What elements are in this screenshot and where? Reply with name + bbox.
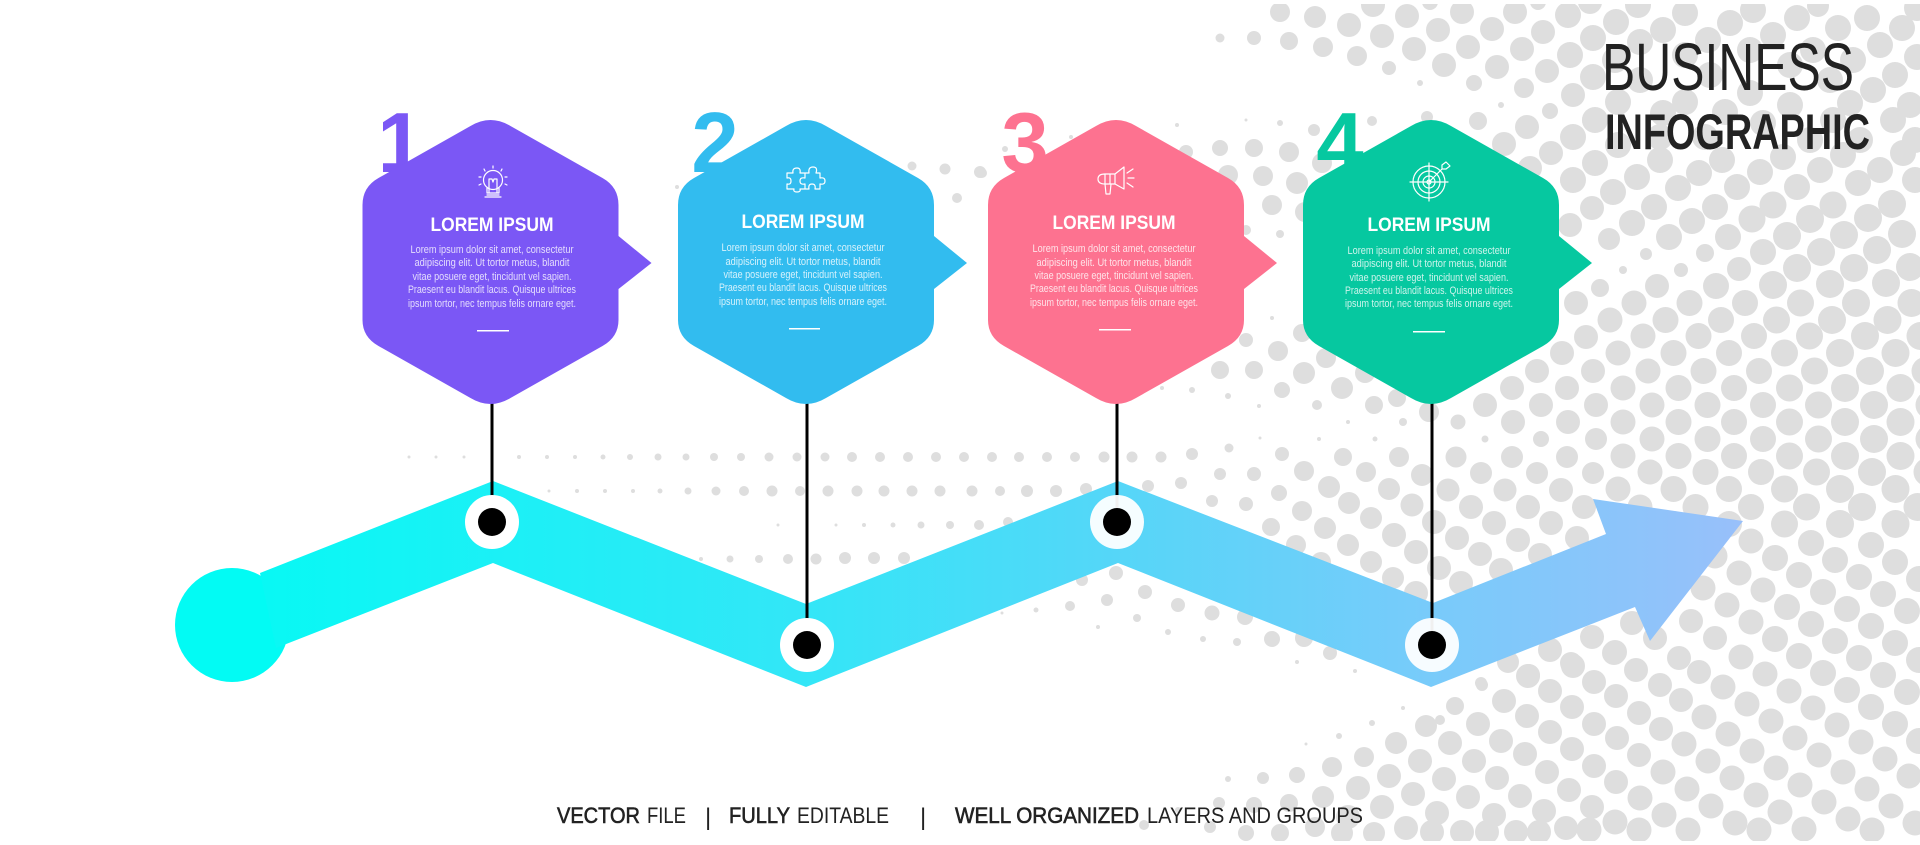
- panel: step 2: [678, 96, 967, 404]
- number 2: 2: [691, 96, 739, 191]
- dots around the arrow band: [1000, 428, 1644, 725]
- body text: adipiscing elit. Ut tortor metus, blandit: [726, 256, 880, 268]
- hexagon 2: [678, 120, 967, 404]
- hexagon 4: [1303, 120, 1592, 404]
- footer caption: |: [705, 804, 711, 831]
- hexagon 3: [988, 120, 1277, 404]
- node 2 marker: [780, 618, 834, 672]
- footer caption: WELL ORGANIZED: [955, 803, 1139, 828]
- top band of dots: [1216, 0, 1920, 205]
- heading: LOREM IPSUM: [430, 215, 554, 236]
- body text: adipiscing elit. Ut tortor metus, blandit: [1352, 258, 1506, 270]
- footer caption: VECTOR: [557, 803, 640, 828]
- footer caption: FULLY: [729, 803, 790, 828]
- body text: ipsum tortor, nec tempus felis ornare eget.: [719, 296, 887, 308]
- body text: ipsum tortor, nec tempus felis ornare eget.: [408, 298, 576, 310]
- arrow start circle: [175, 568, 289, 682]
- node 1 marker: [465, 495, 519, 549]
- heading: LOREM IPSUM: [742, 212, 864, 233]
- footer caption: |: [920, 804, 926, 831]
- body text: Lorem ipsum dolor sit amet, consectetur: [410, 244, 574, 256]
- number 1: 1: [376, 96, 424, 191]
- heading: LOREM IPSUM: [1368, 215, 1490, 236]
- number 3: 3: [1001, 96, 1049, 191]
- horizontal rows of small dots: [408, 444, 1234, 564]
- body text: vitae posuere eget, tincidunt vel sapien.: [724, 269, 882, 281]
- number 4: 4: [1316, 96, 1364, 191]
- body text: adipiscing elit. Ut tortor metus, blandit: [1036, 257, 1192, 269]
- hexagon 1: [362, 120, 652, 404]
- icon: light bulb: [479, 166, 507, 197]
- body text: Praesent eu blandit lacus. Quisque ultrices: [719, 282, 887, 294]
- body text: [719, 242, 887, 308]
- footer caption: FILE: [647, 803, 686, 828]
- arrow body and head: [260, 481, 1743, 687]
- body text: Lorem ipsum dolor sit amet, consectetur: [1032, 243, 1196, 255]
- footer caption: EDITABLE: [797, 803, 889, 828]
- body text: Lorem ipsum dolor sit amet, consectetur: [722, 242, 885, 254]
- panel: step 1: [362, 96, 652, 404]
- icon: megaphone: [1098, 167, 1134, 194]
- connector lines: [492, 400, 1432, 645]
- dots between and behind the hexagons: [675, 111, 1608, 434]
- icon: target: [1410, 162, 1450, 201]
- body text: [1345, 245, 1513, 310]
- regular lattice rows on the right: [1598, 289, 1920, 538]
- body text: ipsum tortor, nec tempus felis ornare eget.: [1345, 298, 1513, 310]
- heading: LOREM IPSUM: [1052, 213, 1176, 234]
- footer caption: [557, 803, 1363, 831]
- body text: [1030, 243, 1198, 309]
- zigzag arrow band: [175, 481, 1743, 687]
- body text: Praesent eu blandit lacus. Quisque ultrices: [408, 284, 576, 296]
- node 3 marker: [1090, 495, 1144, 549]
- node 4 marker: [1405, 618, 1459, 672]
- body text: [408, 244, 576, 310]
- panel: step 3: [988, 96, 1277, 404]
- body text: vitae posuere eget, tincidunt vel sapien.: [412, 271, 572, 283]
- body text: vitae posuere eget, tincidunt vel sapien.: [1350, 272, 1508, 284]
- lower right diagonal dots: [1139, 528, 1920, 844]
- right band dots above the regular lattice: [1591, 190, 1920, 299]
- icon: puzzle: [787, 167, 825, 192]
- body text: Praesent eu blandit lacus. Quisque ultrices: [1345, 285, 1513, 297]
- body text: Lorem ipsum dolor sit amet, consectetur: [1348, 245, 1511, 257]
- panel: step 4: [1303, 96, 1592, 404]
- footer caption: LAYERS AND GROUPS: [1147, 803, 1363, 828]
- title: [1602, 30, 1870, 160]
- body text: adipiscing elit. Ut tortor metus, blandit: [414, 257, 570, 269]
- body text: vitae posuere eget, tincidunt vel sapien.: [1034, 270, 1194, 282]
- body text: ipsum tortor, nec tempus felis ornare eget.: [1030, 297, 1198, 309]
- body text: Praesent eu blandit lacus. Quisque ultrices: [1030, 283, 1198, 295]
- background halftone dot field: [408, 0, 1920, 844]
